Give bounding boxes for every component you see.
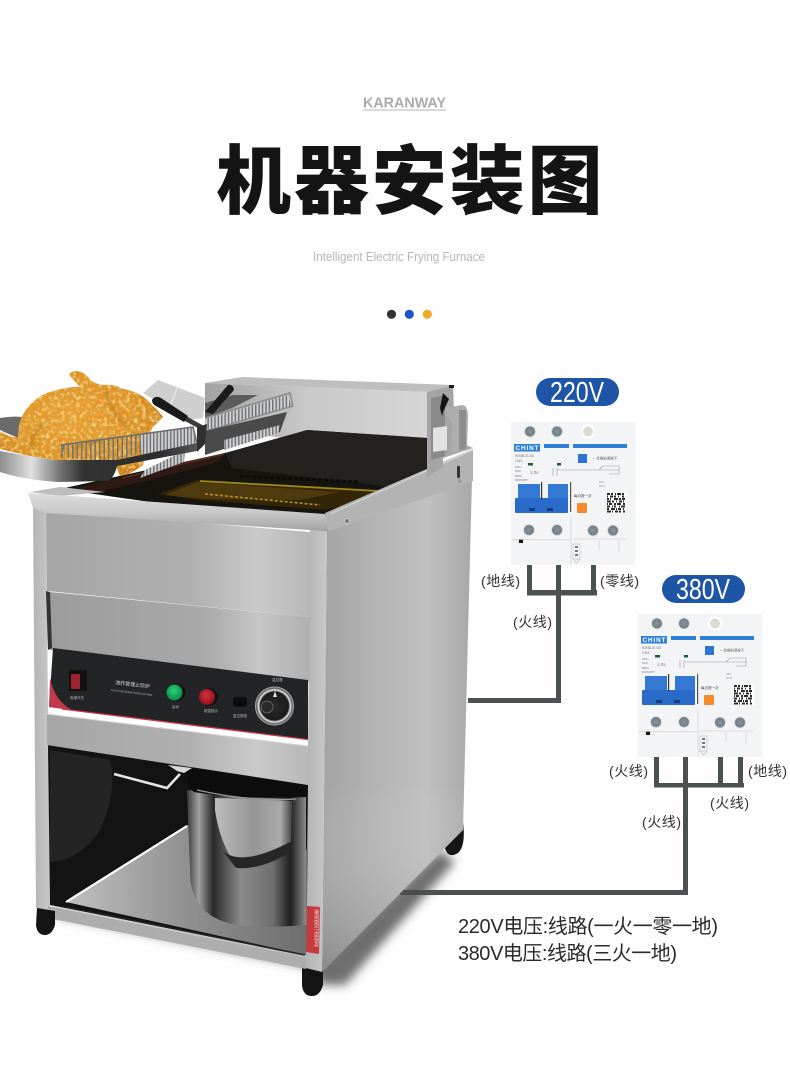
green button — [166, 684, 185, 701]
label: live wire right: (火线) — [710, 795, 749, 811]
oil surface — [158, 480, 380, 510]
QR code — [607, 493, 627, 513]
220V circuit breaker: • 合闸前请按下 — [592, 456, 618, 462]
220V circuit breaker: C63 — [599, 481, 604, 484]
orange test button: 每月按一次 — [574, 493, 592, 499]
front top rim — [28, 493, 328, 532]
lower terminals — [522, 523, 620, 538]
model text: NXBLE-63 — [515, 453, 535, 458]
label: live wire left: (火线) — [609, 763, 648, 779]
front right column — [306, 530, 327, 972]
control panel — [49, 648, 308, 740]
label: earth wire: (地线) — [748, 763, 787, 779]
chrome tray — [0, 443, 197, 482]
rocker switch — [69, 670, 87, 691]
wiring to the 380V breaker — [400, 757, 744, 895]
blue toggle — [515, 482, 571, 513]
label: live wire: (火线) — [513, 614, 552, 630]
front left column — [33, 505, 50, 912]
right basket — [205, 385, 293, 455]
380V circuit breaker: C63 — [726, 673, 731, 676]
hinge mechanism — [427, 385, 473, 483]
three dots — [387, 310, 432, 319]
380V wire labels — [609, 763, 787, 830]
upper front panel — [46, 510, 310, 617]
title: 机器安装图 — [216, 120, 602, 230]
380V circuit breaker — [638, 614, 762, 757]
warning sticker: 请将前部向下抬起移动 — [313, 909, 320, 948]
rear foot — [445, 822, 464, 855]
220V wire labels — [481, 573, 639, 630]
back basket lid — [143, 380, 205, 420]
bottom rail — [48, 906, 306, 969]
model text: 50Hz — [642, 662, 649, 665]
cavity interior — [48, 745, 308, 955]
right basket handle — [205, 385, 234, 414]
panel small labels: 复位按钮 — [233, 713, 247, 719]
label: earth wire: (地线) — [481, 573, 520, 589]
back tray rim — [0, 417, 22, 438]
mid strip — [47, 714, 308, 785]
model text: RCP100HT — [642, 671, 655, 674]
panel small labels: 油炸管理止煎炉 — [115, 679, 150, 690]
model text: 1.0s — [530, 470, 539, 475]
model text: NXBLE-63 — [642, 645, 662, 650]
panel small labels: 温控器 — [272, 677, 283, 683]
top terminals — [523, 424, 595, 438]
left foot — [36, 908, 55, 935]
model text: C63 — [515, 458, 523, 463]
rim bolt — [345, 519, 349, 523]
panel small labels: 电源开关 — [70, 695, 84, 701]
220V note: 220V电压:线路(一火一零一地) — [458, 915, 718, 938]
panel small labels: MULTI-FUNCTIONAL FRYER CONTROL — [111, 688, 153, 697]
model text: 1.0s — [657, 662, 666, 667]
fryer machine — [0, 371, 473, 996]
model text: C63 — [642, 650, 650, 655]
brand name: KARANWAY — [363, 94, 446, 112]
model text — [642, 645, 666, 674]
model text: 230V~ — [642, 658, 650, 661]
380V note: 380V电压:线路(三火一地) — [458, 942, 677, 965]
front basket handle — [152, 397, 207, 452]
model text: 500A — [642, 666, 649, 670]
top terminals — [650, 616, 722, 630]
temperature dial — [255, 686, 294, 726]
pot inner reflection — [215, 798, 292, 868]
model text: 230V~ — [515, 466, 523, 469]
chicken crevices — [30, 390, 128, 452]
220V circuit breaker: 1P+N — [599, 485, 606, 488]
front foot — [302, 968, 323, 996]
model text: 500A — [515, 474, 522, 478]
test square — [578, 454, 587, 463]
220V circuit breaker — [511, 422, 635, 565]
oil pot — [187, 766, 307, 927]
floor edge highlight — [66, 826, 187, 902]
cavity floor — [66, 825, 308, 955]
QR code — [734, 685, 754, 705]
floor shadow — [40, 850, 455, 985]
380V circuit breaker: 1P+N — [726, 677, 733, 680]
lower terminals — [649, 715, 747, 730]
circuit diagram — [680, 658, 746, 668]
panel small labels — [70, 677, 283, 719]
pot handle — [114, 765, 192, 788]
subtitle: Intelligent Electric Frying Furnace — [313, 250, 485, 264]
fry well — [30, 430, 427, 516]
heading block — [216, 94, 602, 319]
circuit diagram — [553, 466, 619, 476]
red button — [199, 688, 218, 706]
model text: RCP100HT — [515, 479, 528, 482]
arrow label — [573, 544, 580, 563]
220V badge: 220V — [550, 377, 605, 409]
380V circuit breaker: • 合闸前请按下 — [719, 648, 745, 654]
warning sticker — [306, 906, 320, 954]
orange test button: 每月按一次 — [701, 685, 719, 691]
wiring to the 220V breaker — [468, 565, 597, 703]
lower front panel — [50, 592, 310, 682]
side latch — [457, 466, 460, 478]
reset switch — [233, 697, 247, 707]
panel small labels: 超温指示 — [204, 708, 218, 714]
380V badge: 380V — [676, 574, 731, 606]
label: live wire main: (火线) — [642, 814, 681, 830]
test square — [705, 646, 714, 655]
fried chicken — [0, 371, 163, 476]
model text — [515, 453, 539, 482]
pot rim — [187, 766, 307, 798]
right top plate — [325, 449, 473, 532]
right side panel — [322, 478, 472, 972]
brand tag: CHINT — [642, 637, 666, 644]
voltage notes — [458, 915, 718, 965]
blue toggle — [642, 674, 698, 705]
model text: 50Hz — [515, 470, 522, 473]
brand tag: CHINT — [516, 445, 539, 452]
label: neutral wire: (零线) — [600, 573, 639, 589]
lift handle — [445, 405, 468, 454]
rear hood — [205, 377, 453, 438]
arrow label — [700, 736, 707, 755]
panel small labels: 启动 — [172, 704, 179, 710]
orange test button — [574, 493, 592, 513]
orange test button — [701, 685, 719, 705]
front mesh basket — [62, 427, 197, 478]
